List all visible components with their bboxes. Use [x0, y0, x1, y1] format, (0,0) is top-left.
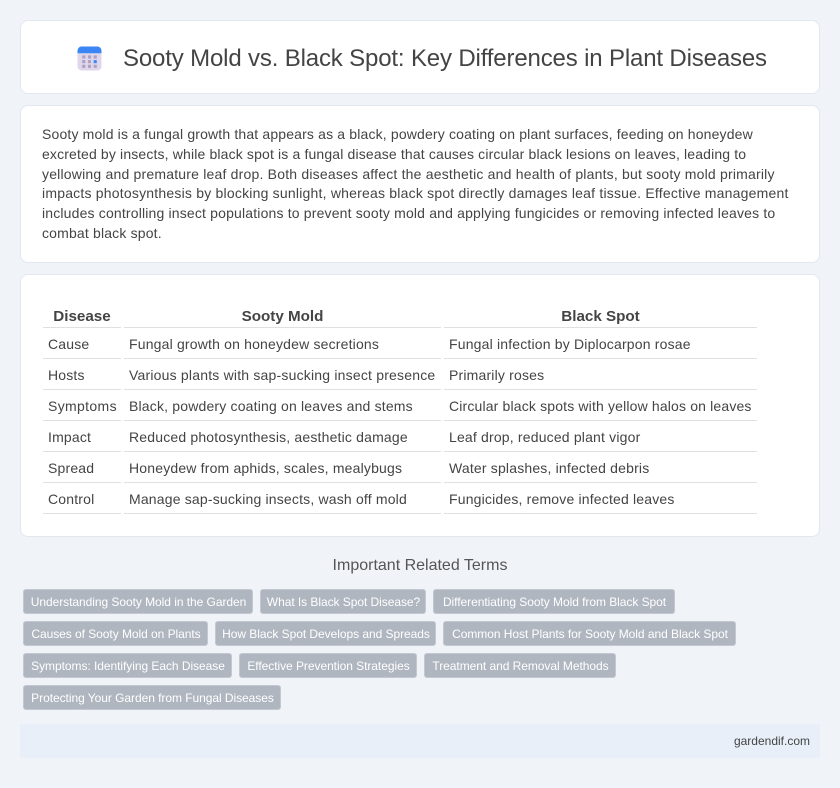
panel: intro text	[20, 105, 820, 263]
row: cause: Fungal growth on honeydew secretions	[129, 336, 379, 352]
table header	[53, 308, 640, 325]
title: Sooty Mold vs. Black Spot: Key Differences in Plant Diseases	[123, 45, 767, 72]
tag	[23, 589, 253, 614]
row: cause: Fungal infection by Diplocarpon rosae	[449, 336, 691, 352]
row: control	[48, 491, 675, 507]
tag: Treatment and Removal Methods	[432, 659, 609, 673]
tag	[239, 653, 417, 678]
tag	[215, 621, 436, 646]
tag list	[23, 589, 736, 710]
tag	[424, 653, 616, 678]
row: cause: Cause	[48, 336, 89, 352]
tag: How Black Spot Develops and Spreads	[222, 627, 430, 641]
tag	[23, 685, 281, 710]
heading: related terms: Important Related Terms	[333, 557, 507, 574]
tag	[23, 621, 208, 646]
tag: Common Host Plants for Sooty Mold and Black Spot	[452, 627, 728, 641]
row: symptoms	[48, 398, 752, 414]
panel: comparison table	[20, 274, 820, 537]
row: impact: Leaf drop, reduced plant vigor	[449, 429, 640, 445]
row: spread: Honeydew from aphids, scales, mealybugs	[129, 460, 402, 476]
row: control: Manage sap-sucking insects, wash off mold	[129, 491, 407, 507]
tag: Understanding Sooty Mold in the Garden	[31, 595, 246, 609]
panel: intro text: includes controlling insect populations to prevent sooty mold and applying fungicides or removing infected leaves to	[42, 205, 775, 221]
row: control: Fungicides, remove infected leaves	[449, 491, 675, 507]
row: symptoms: Circular black spots with yellow halos on leaves	[449, 398, 752, 414]
tag: Protecting Your Garden from Fungal Diseases	[31, 691, 274, 705]
footer credit: gardendif.com	[734, 734, 810, 748]
tag: Differentiating Sooty Mold from Black Spot	[443, 595, 666, 609]
tag	[23, 653, 232, 678]
panel: intro text: yellowing and premature leaf drop. Both diseases affect the aesthetic and health of plants, but sooty mold primarily	[42, 166, 775, 182]
row: hosts: Hosts	[48, 367, 85, 383]
row: symptoms: Symptoms	[48, 398, 117, 414]
row: hosts: Various plants with sap-sucking insect presence	[129, 367, 435, 383]
tag: Causes of Sooty Mold on Plants	[31, 627, 201, 641]
table header: Black Spot	[561, 308, 640, 325]
row: symptoms: Black, powdery coating on leaves and stems	[129, 398, 413, 414]
row: impact	[48, 429, 640, 445]
icon: calendar	[78, 46, 102, 70]
tag: Effective Prevention Strategies	[247, 659, 410, 673]
tag: Symptoms: Identifying Each Disease	[31, 659, 225, 673]
footer	[20, 724, 820, 758]
panel: intro text: Sooty mold is a fungal growth that appears as a black, powdery coating on plant surfaces, feeding on honeydew	[42, 126, 753, 142]
row: control: Control	[48, 491, 94, 507]
panel: intro text: impacts photosynthesis by blocking sunlight, whereas black spot directly damages leaf tissue. Effective management	[42, 185, 789, 201]
header card	[20, 20, 820, 94]
panel: intro text: combat black spot.	[42, 225, 162, 241]
table header: Disease	[53, 308, 111, 325]
row: impact: Impact	[48, 429, 91, 445]
row: impact: Reduced photosynthesis, aesthetic damage	[129, 429, 408, 445]
tag	[443, 621, 736, 646]
row: spread	[48, 460, 649, 476]
row: spread: Water splashes, infected debris	[449, 460, 649, 476]
row: hosts: Primarily roses	[449, 367, 544, 383]
panel: intro text: excreted by insects, while black spot is a fungal disease that causes circular black lesions on leaves, leading to	[42, 146, 746, 162]
table header: Sooty Mold	[242, 308, 323, 325]
tag	[260, 589, 426, 614]
tag: What Is Black Spot Disease?	[267, 595, 420, 609]
row: hosts	[48, 367, 544, 383]
row: cause	[48, 336, 691, 352]
row: spread: Spread	[48, 460, 94, 476]
tag	[433, 589, 675, 614]
